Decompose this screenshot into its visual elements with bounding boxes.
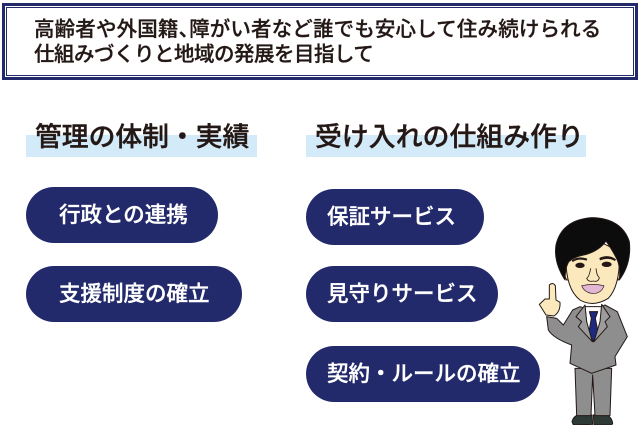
nose <box>587 268 599 281</box>
pill: 支援制度の確立: 支援制度の確立 <box>59 282 210 306</box>
title text: 高齢者や外国籍、障がい者など誰でも安心して住み続けられる <box>34 18 601 41</box>
pill: 行政との連携: 行政との連携 <box>59 203 188 227</box>
shirt <box>585 307 602 342</box>
double border frame <box>2 3 638 80</box>
hair <box>556 218 630 280</box>
shoes <box>572 414 613 425</box>
mouth <box>582 284 604 294</box>
hand pointing finger <box>539 283 560 316</box>
eyes <box>572 256 616 268</box>
pill: 保証サービス <box>306 189 484 245</box>
illustration: man in suit pointing up <box>538 217 630 425</box>
title box <box>2 3 638 80</box>
pill: 支援制度の確立 <box>26 266 242 322</box>
title text: 仕組みづくりと地域の発展を目指して <box>34 43 373 66</box>
pill: 見守りサービス: 見守りサービス <box>327 282 478 306</box>
pill: 見守りサービス <box>306 266 498 322</box>
tie <box>589 312 598 342</box>
trousers <box>575 368 612 416</box>
left heading: 管理の体制・実績 <box>35 122 249 152</box>
title text <box>34 18 601 66</box>
lapels <box>576 304 610 342</box>
pill: 行政との連携 <box>26 187 218 243</box>
pill: 契約・ルールの確立 <box>306 346 540 402</box>
pill: 保証サービス: 保証サービス <box>327 205 456 229</box>
face <box>566 238 619 303</box>
jacket <box>547 305 627 373</box>
pill: 契約・ルールの確立: 契約・ルールの確立 <box>327 362 521 386</box>
ear left and right <box>563 263 622 280</box>
right heading: 受け入れの仕組み作り <box>315 122 584 152</box>
